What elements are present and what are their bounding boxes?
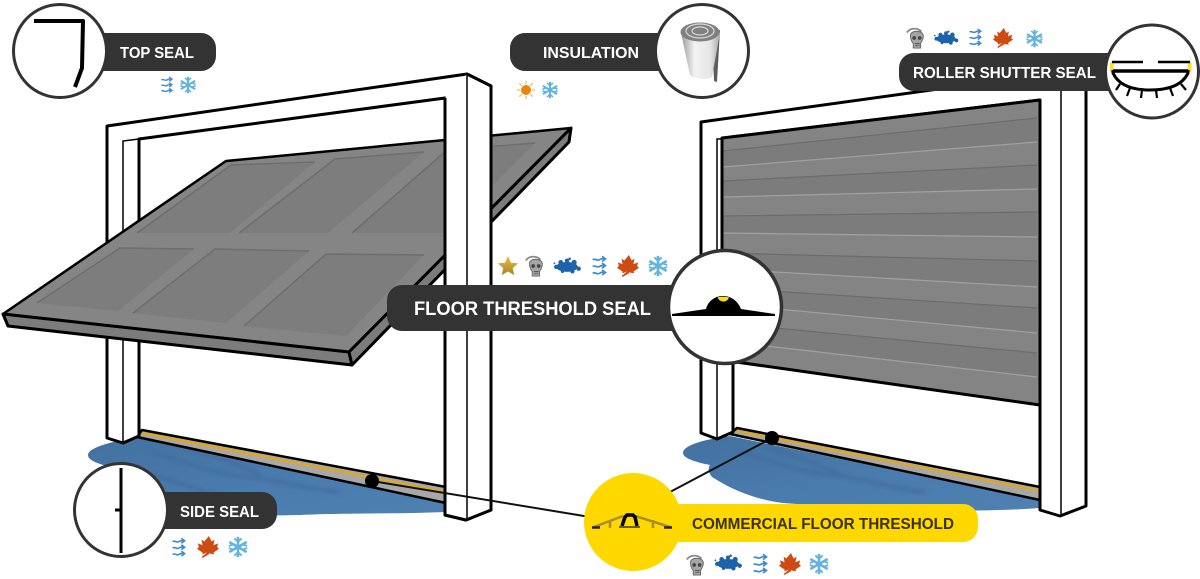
icon: snowflake — [229, 537, 247, 557]
icon: snowflake — [649, 256, 667, 276]
icon: leaf — [617, 255, 639, 277]
callout: side seal — [74, 464, 277, 558]
icon: commercial threshold profile — [592, 515, 672, 528]
icon: wind — [970, 29, 981, 46]
icon: star — [498, 256, 518, 275]
icon: snowflake — [1027, 30, 1042, 47]
icon: insulation roll — [680, 22, 720, 82]
connector left — [365, 474, 590, 517]
icon: wind — [754, 554, 766, 573]
icon: rodent — [907, 29, 923, 48]
connector right — [670, 431, 779, 492]
callout: floor threshold seal — [387, 250, 782, 364]
frame right — [701, 72, 1086, 516]
icon: floor threshold profile — [672, 296, 775, 316]
icon: roller shutter seal profile — [1110, 62, 1192, 98]
floor threshold strip right — [730, 428, 1040, 500]
icon: splash — [934, 30, 958, 45]
tilted door — [3, 128, 571, 365]
icon: rodent — [526, 257, 542, 276]
icon: top seal profile — [34, 21, 83, 87]
puddle left — [88, 437, 446, 515]
door panels — [37, 143, 535, 336]
callout: roller shutter seal — [899, 25, 1198, 118]
label: roller shutter seal: ROLLER SHUTTER SEAL — [913, 65, 1096, 82]
frame left — [107, 74, 491, 520]
puddle right — [683, 436, 1040, 511]
icon: snowflake — [542, 82, 558, 98]
label: top seal: TOP SEAL — [120, 45, 194, 62]
roller shutter — [722, 100, 1040, 405]
label: insulation: INSULATION — [543, 45, 639, 62]
icon: snowflake — [810, 554, 828, 574]
icon: wind — [593, 256, 605, 275]
icon: splash — [714, 555, 742, 571]
icon: leaf — [197, 536, 219, 558]
icon: leaf — [993, 28, 1013, 48]
icon: leaf — [779, 553, 801, 575]
right door scene — [670, 72, 1086, 516]
callout: commercial floor threshold — [584, 473, 978, 575]
icon: snowflake — [180, 77, 196, 93]
label: side seal: SIDE SEAL — [180, 504, 259, 521]
right post front — [445, 74, 491, 520]
floor threshold strip left — [137, 430, 446, 503]
icon: sun — [517, 81, 535, 99]
label: floor threshold seal: FLOOR THRESHOLD SEAL — [414, 299, 651, 320]
icon: splash — [554, 258, 581, 274]
callout: insulation — [510, 4, 748, 99]
icon: side seal profile — [115, 468, 121, 553]
icon: wind — [161, 77, 172, 92]
callout: top seal — [14, 4, 216, 98]
icon: wind — [173, 538, 185, 556]
left door scene — [3, 74, 590, 520]
slats — [723, 118, 1037, 377]
icon: rodent — [687, 556, 703, 575]
label: commercial floor threshold: COMMERCIAL FLOOR THRESHOLD — [692, 516, 954, 533]
